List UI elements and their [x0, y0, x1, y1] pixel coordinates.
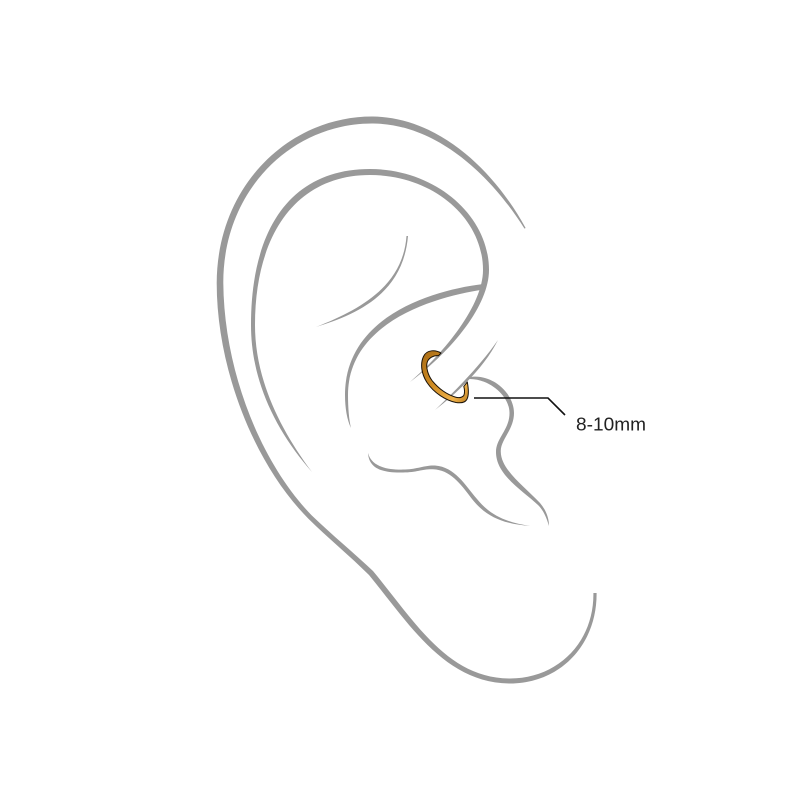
ear outer outline: [217, 116, 597, 683]
concha bottom curve: [368, 453, 530, 526]
leader line: [474, 398, 565, 415]
upper branch curve: [345, 284, 482, 428]
tragus curve: [468, 377, 549, 526]
inner ridge of the ear: [251, 169, 489, 472]
antihelix short curve: [316, 236, 408, 327]
ear fold line behind ring: [435, 340, 498, 410]
size label: 8-10mm: [576, 414, 646, 434]
gold ring: [422, 351, 468, 403]
